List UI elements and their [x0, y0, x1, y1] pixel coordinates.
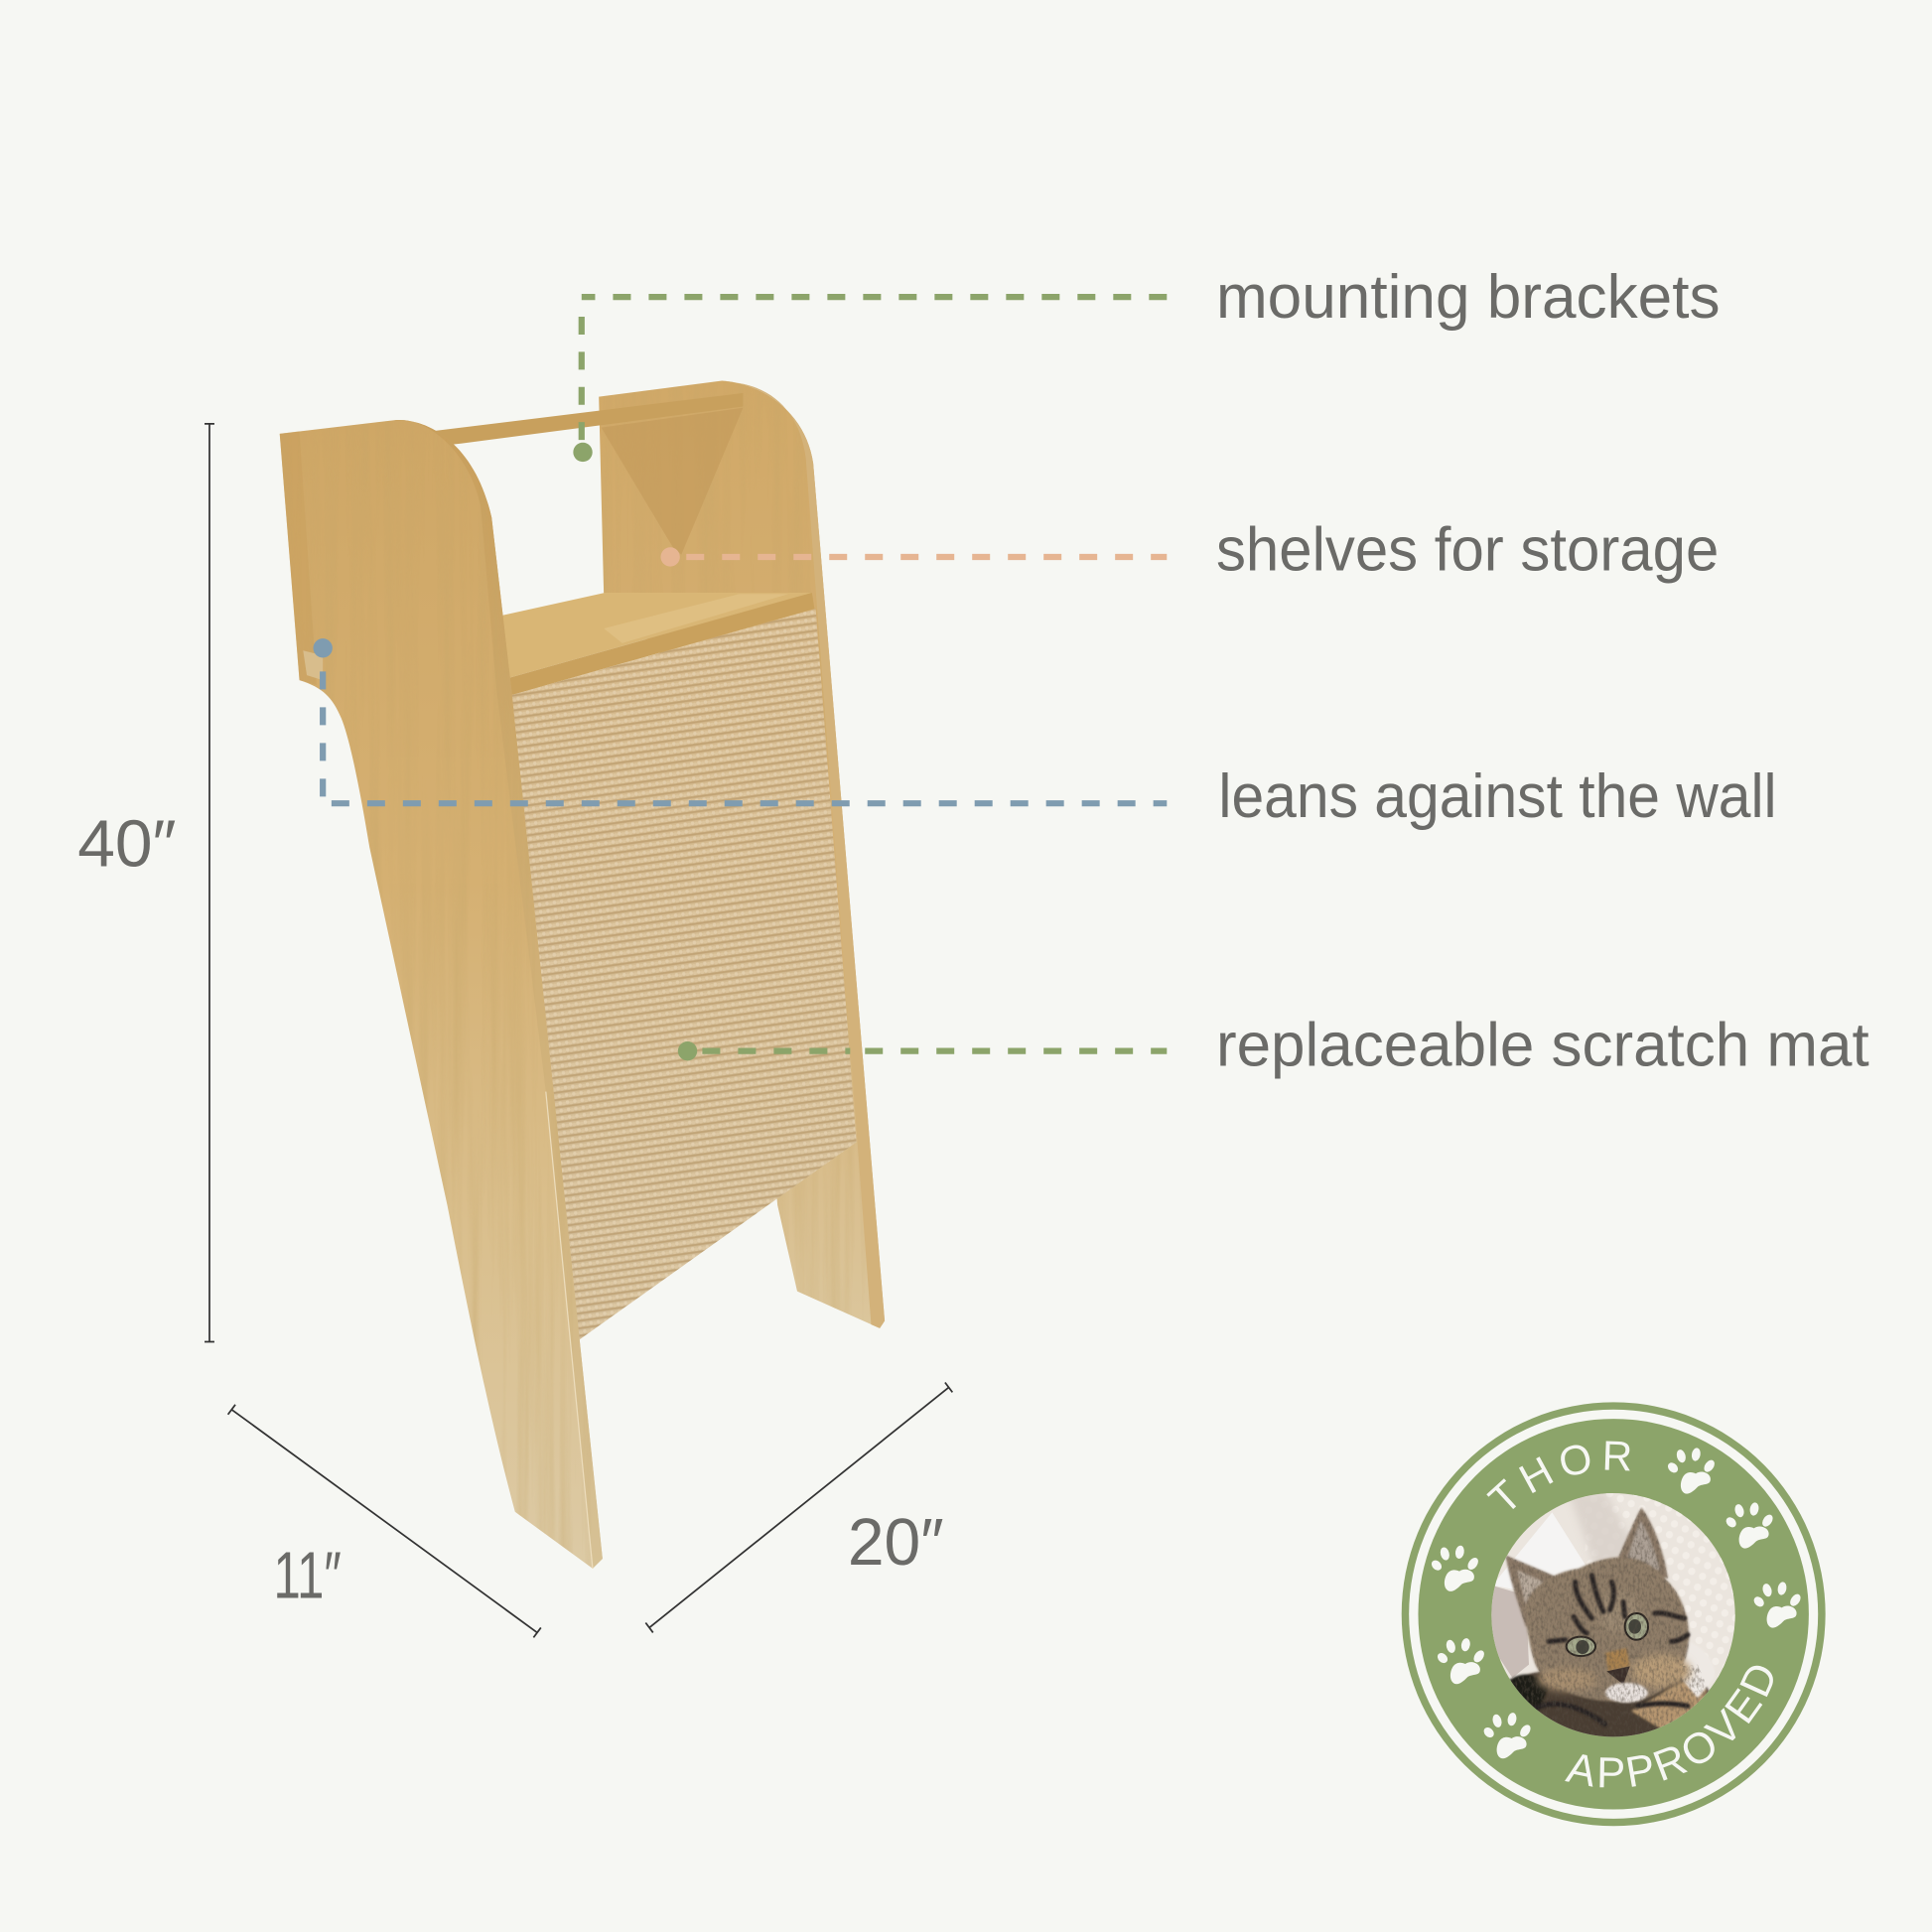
dimension: height 40 inches: 40″ [77, 806, 176, 881]
dimension: depth 11 inches: 11″ [274, 1539, 342, 1613]
callout: replaceable scratch mat [678, 1012, 1869, 1080]
left side panel [280, 420, 603, 1569]
shelf highlight [604, 594, 788, 643]
callout: mounting brackets: mounting brackets [1216, 263, 1721, 332]
dimension: height 40 inches [77, 424, 214, 1342]
right panel grain [643, 391, 840, 1311]
bracket patch [303, 650, 323, 680]
callout: shelves for storage: shelves for storage [1216, 516, 1719, 585]
badge rings [1402, 1402, 1826, 1826]
scratch mat [507, 609, 857, 1344]
shelf top [499, 593, 812, 679]
dimension: depth 11 inches [228, 1405, 541, 1637]
left panel rear shading [280, 431, 317, 685]
light edge line [546, 1092, 593, 1569]
kitten eyes [1567, 1613, 1648, 1656]
badge text: APPROVED: APPROVED [1565, 1666, 1773, 1787]
right side panel [599, 380, 885, 1328]
callout: replaceable scratch mat: replaceable scratch mat [1216, 1012, 1869, 1080]
callout: leans against the wall: leans against the wall [1218, 762, 1777, 831]
badge: Thor approved [1402, 1402, 1826, 1827]
dimension: width 20 inches [645, 1382, 952, 1632]
left panel grain [326, 694, 570, 1552]
right panel front edge [722, 380, 885, 1328]
fur texture [1502, 1506, 1718, 1744]
left panel front edge [394, 420, 603, 1569]
top bar [431, 393, 743, 446]
kitten photo illustration [1489, 1492, 1737, 1744]
callout: leans against the wall [313, 638, 1777, 831]
inner shadow wedge [602, 408, 743, 554]
kitten body and head shapes [1506, 1507, 1715, 1744]
kitten stripes [1529, 1576, 1688, 1725]
product: wooden scratcher [271, 369, 894, 1578]
dimension: width 20 inches: 20″ [848, 1505, 944, 1580]
callout: mounting brackets [573, 263, 1721, 462]
paw prints [1430, 1448, 1803, 1758]
kitten cheek tones [1537, 1591, 1691, 1691]
callout: shelves for storage [660, 516, 1719, 585]
badge inner artwork [1430, 1448, 1803, 1758]
kitten nose [1605, 1648, 1630, 1671]
badge text: THOR: THOR [1486, 1442, 1630, 1509]
shelf front [505, 593, 814, 696]
